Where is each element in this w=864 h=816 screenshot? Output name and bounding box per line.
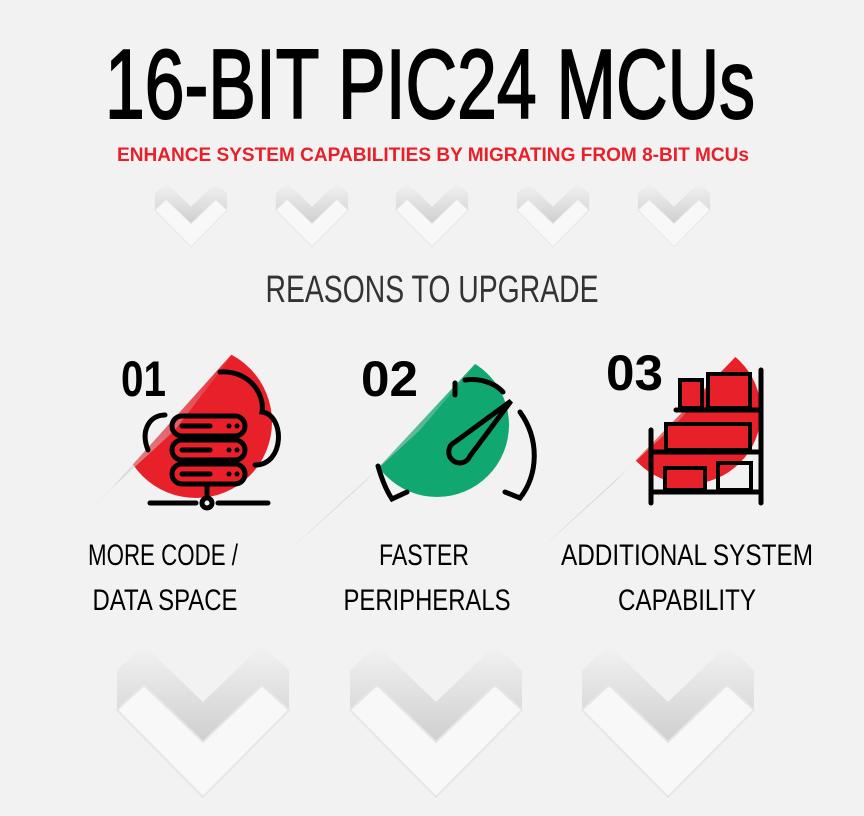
label 3 bbox=[561, 539, 813, 617]
label 3: CAPABILITY bbox=[618, 584, 756, 617]
label 3: ADDITIONAL SYSTEM bbox=[561, 539, 813, 572]
panel 2: faster peripherals bbox=[295, 350, 534, 545]
heading: reasons to upgrade: REASONS TO UPGRADE bbox=[266, 269, 598, 311]
panel 3: additional system capability: 03 bbox=[606, 345, 663, 401]
icon: server cloud bbox=[145, 372, 278, 508]
icon: shelves bbox=[651, 370, 761, 503]
large chevrons bbox=[117, 645, 754, 797]
label 1: MORE CODE / bbox=[88, 539, 238, 572]
small chevrons bbox=[155, 183, 710, 247]
label 2: PERIPHERALS bbox=[344, 584, 510, 617]
panel 2: faster peripherals: 02 bbox=[361, 351, 418, 407]
panel 3: additional system capability bbox=[550, 355, 764, 541]
panel 1: more code / data space: 01 bbox=[121, 351, 166, 407]
icon: gauge bbox=[378, 380, 534, 499]
label 1: DATA SPACE bbox=[92, 584, 238, 617]
label 2: FASTER bbox=[379, 539, 469, 572]
label 1 bbox=[88, 539, 238, 617]
panel 1: more code / data space bbox=[74, 354, 281, 522]
subtitle: ENHANCE SYSTEM CAPABILITIES BY MIGRATING FROM 8-BIT MCUs bbox=[117, 145, 749, 166]
label 2 bbox=[344, 539, 510, 617]
